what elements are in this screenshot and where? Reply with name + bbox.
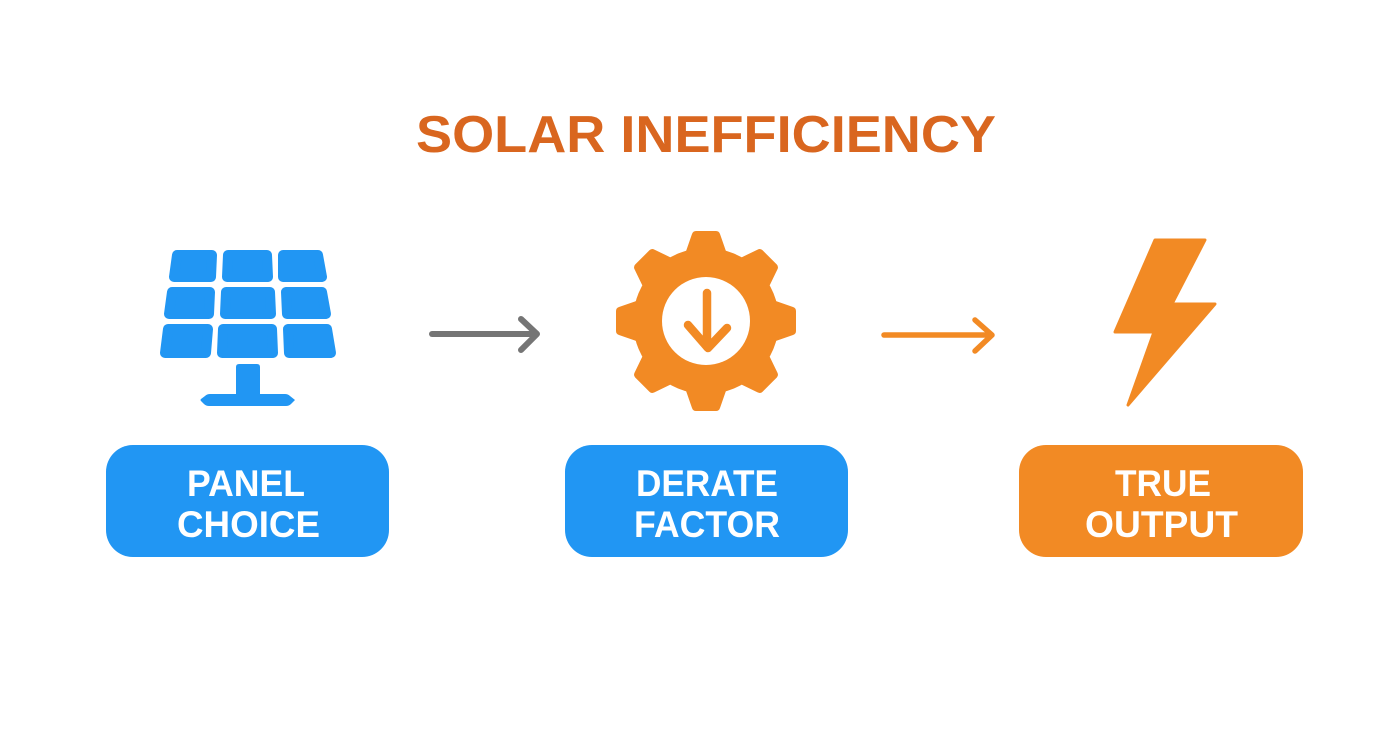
label: derate factor: DERATE <box>636 463 778 504</box>
label: true output <box>1019 445 1303 557</box>
label: panel choice: PANEL <box>187 463 305 504</box>
arrow: panel to derate <box>432 319 537 350</box>
icon: gear with down arrow <box>616 231 796 411</box>
arrow: derate to output <box>884 320 992 351</box>
label: true output: OUTPUT <box>1085 504 1238 545</box>
label: derate factor <box>565 445 848 557</box>
label: true output: TRUE <box>1115 463 1211 504</box>
label: derate factor: FACTOR <box>634 504 780 545</box>
title: SOLAR INEFFICIENCY <box>416 106 996 164</box>
icon: lightning bolt <box>1115 240 1215 405</box>
label: panel choice: CHOICE <box>177 504 320 545</box>
label: panel choice <box>106 445 389 557</box>
icon: solar panel <box>165 255 331 406</box>
